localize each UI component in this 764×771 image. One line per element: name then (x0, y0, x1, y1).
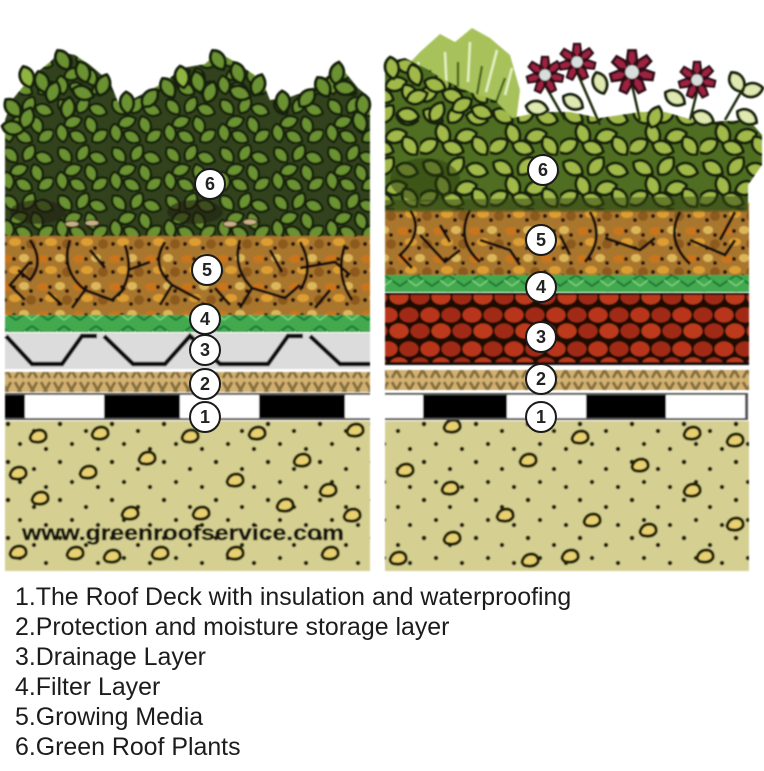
layer: right protection layer (385, 370, 749, 390)
number markers: right panel: 5 (536, 230, 546, 250)
layer: right filter layer (385, 275, 749, 292)
panel: right roof cross-section (383, 28, 764, 571)
number markers: left panel: 6 (205, 174, 215, 194)
legend text block: 3.Drainage Layer (15, 643, 206, 671)
number markers: left panel: 5 (202, 260, 212, 280)
layer: left roof deck insulation and waterproofing (5, 393, 370, 420)
layer: right subsoil roof deck base (385, 420, 749, 571)
number markers: left panel: 2 (200, 374, 210, 394)
number markers: right panel: 4 (536, 277, 546, 297)
legend text block: 1.The Roof Deck with insulation and waterproofing (15, 583, 571, 611)
layer: left green roof plants (1, 45, 370, 240)
watermark text: www.greenroofservice.com (21, 522, 344, 545)
number markers: left panel: 4 (200, 309, 210, 329)
number markers: right panel: 6 (538, 160, 548, 180)
pebbles at the foot of the plants (65, 219, 257, 227)
grasses (392, 28, 520, 130)
number markers: right panel: 2 (536, 369, 546, 389)
layer: left growing media (5, 232, 370, 315)
layer: left subsoil roof deck base (5, 421, 370, 571)
number markers: left panel: 3 (200, 340, 210, 360)
legend text block: 4.Filter Layer (15, 673, 160, 701)
layer: right green roof plants (383, 28, 764, 212)
panel: left roof cross-section (1, 45, 370, 571)
number markers: right panel: 1 (536, 407, 546, 427)
legend text block: 6.Green Roof Plants (15, 733, 241, 761)
layer: right roof deck insulation and waterproofing (385, 393, 748, 420)
layer: right growing media (385, 202, 749, 275)
stems (545, 72, 745, 125)
number markers: right panel (526, 155, 558, 432)
layer: left filter layer (5, 315, 370, 332)
legend text block (15, 583, 571, 761)
number markers: right panel: 3 (536, 327, 546, 347)
legend text block: 5.Growing Media (15, 703, 203, 731)
number markers: left panel: 1 (200, 407, 210, 427)
legend text block: 2.Protection and moisture storage layer (15, 613, 449, 641)
number markers: left panel (190, 169, 225, 432)
layer: left protection layer (5, 372, 370, 392)
layer: right drainage layer of red pebbles (385, 293, 749, 365)
icon: flowers (527, 44, 715, 98)
layer: left drainage layer (5, 333, 370, 369)
